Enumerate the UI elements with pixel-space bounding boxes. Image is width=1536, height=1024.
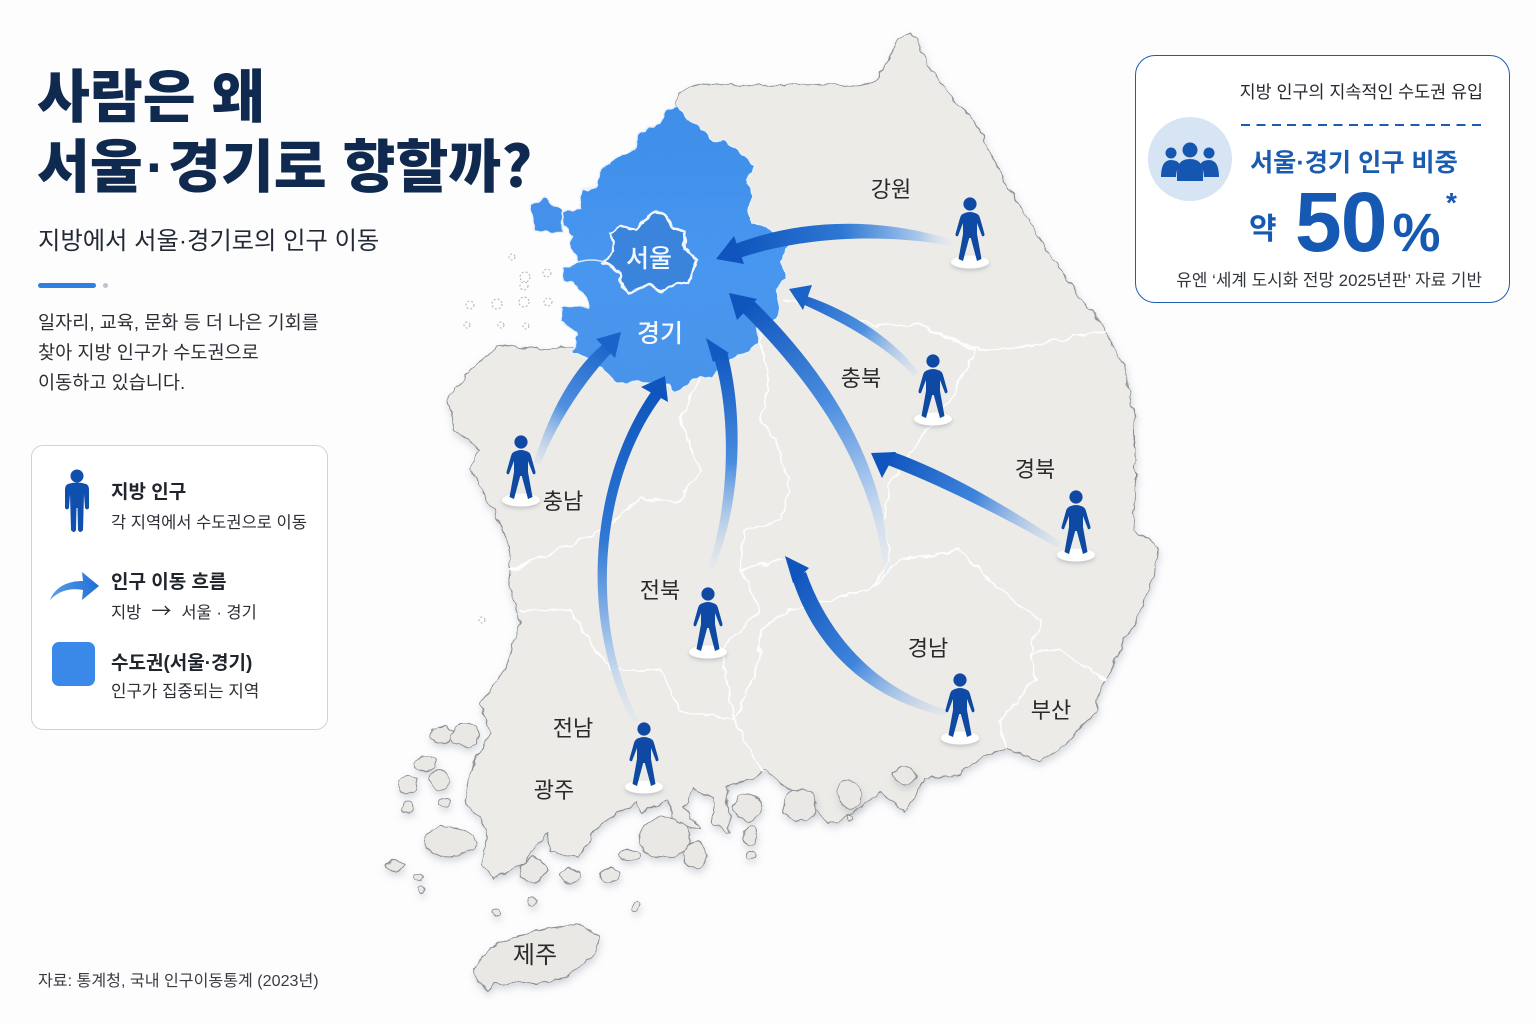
stat card heading: 지방 인구의 지속적인 수도권 유입 [1240,82,1483,102]
region labels: 제주 [513,942,557,969]
arrow: chungnam to capital [534,332,621,465]
stat value: 50% [1295,175,1440,269]
dotted islets off gyeonggi coast [464,254,552,623]
region labels: 전북 [640,578,680,603]
islands: west and south coast, jeju [387,723,917,993]
stat source: 유엔 ‘세계 도시화 전망 2025년판’ 자료 기반 [1176,271,1482,290]
region labels [513,177,1071,969]
arrow: jeonbuk to capital [706,338,738,570]
accent divider [38,283,108,288]
legend text: capital region note: 인구가 집중되는 지역 [111,682,259,701]
person: chungnam [502,435,540,506]
region labels: 광주 [534,778,574,803]
icon: flow arrow [50,572,99,600]
intro paragraph: 찾아 지방 인구가 수도권으로 [38,342,259,363]
region labels: 전남 [553,716,593,741]
title: 사람은 왜 [37,66,265,130]
arrow: gyeongbuk to chungcheong [871,452,1061,548]
region labels: 부산 [1031,698,1071,723]
source: 자료: 통계청, 국내 인구이동통계 (2023년) [38,972,319,990]
region labels: 강원 [871,177,911,202]
icon: person [65,470,89,532]
stat qualifier: 약 [1249,213,1277,246]
stat label: 서울·경기 인구 비중 [1250,149,1458,177]
intro paragraph: 일자리, 교육, 문화 등 더 나은 기회를 [38,312,319,333]
icon: capital region swatch [52,642,95,686]
intro paragraph [38,312,319,393]
intro paragraph: 이동하고 있습니다. [38,372,185,393]
subtitle: 지방에서 서울·경기로의 인구 이동 [38,228,379,255]
regional boundaries [510,300,1110,772]
icon: people group [1148,117,1232,201]
person: jeonnam [625,722,663,794]
seoul [603,212,697,292]
arrow: southeast inland to capital [729,293,889,580]
person: gangwon [951,197,989,268]
region labels: 경북 [1015,457,1055,482]
legend text: local population: 지방 인구 [111,482,186,503]
seoul and gyeonggi border highlight [578,260,604,262]
legend text: flow: 인구 이동 흐름 [111,572,226,593]
person: jeonbuk [689,587,727,658]
legend panel [31,445,328,730]
legend text: flow note: 지방 → 서울 · 경기 [111,595,257,624]
title: 서울·경기로 향할까? [37,120,532,204]
legend text: capital region: 수도권(서울·경기) [111,653,252,674]
region labels: 경기 [637,320,683,348]
region labels: 경남 [908,636,948,661]
dashed divider [1241,124,1481,126]
capital region: gyeonggi [530,105,790,393]
legend text: local population note: 각 지역에서 수도권으로 이동 [111,514,307,532]
person: gyeongnam [941,673,979,744]
region labels: 충남 [543,489,583,514]
region labels: 충북 [841,366,881,391]
stat card [1135,55,1510,303]
title [37,66,532,204]
person: chungbuk [914,354,952,426]
region labels: 서울 [626,245,672,273]
mainland landmass [447,32,1158,880]
arrow: gyeongnam northward [785,556,947,716]
person: gyeongbuk [1057,490,1095,562]
arrow: gangwon to capital [716,224,952,264]
arrow: jeonnam to capital [598,376,668,722]
arrow: chungbuk to capital [789,285,918,376]
stat asterisk: * [1446,187,1457,218]
